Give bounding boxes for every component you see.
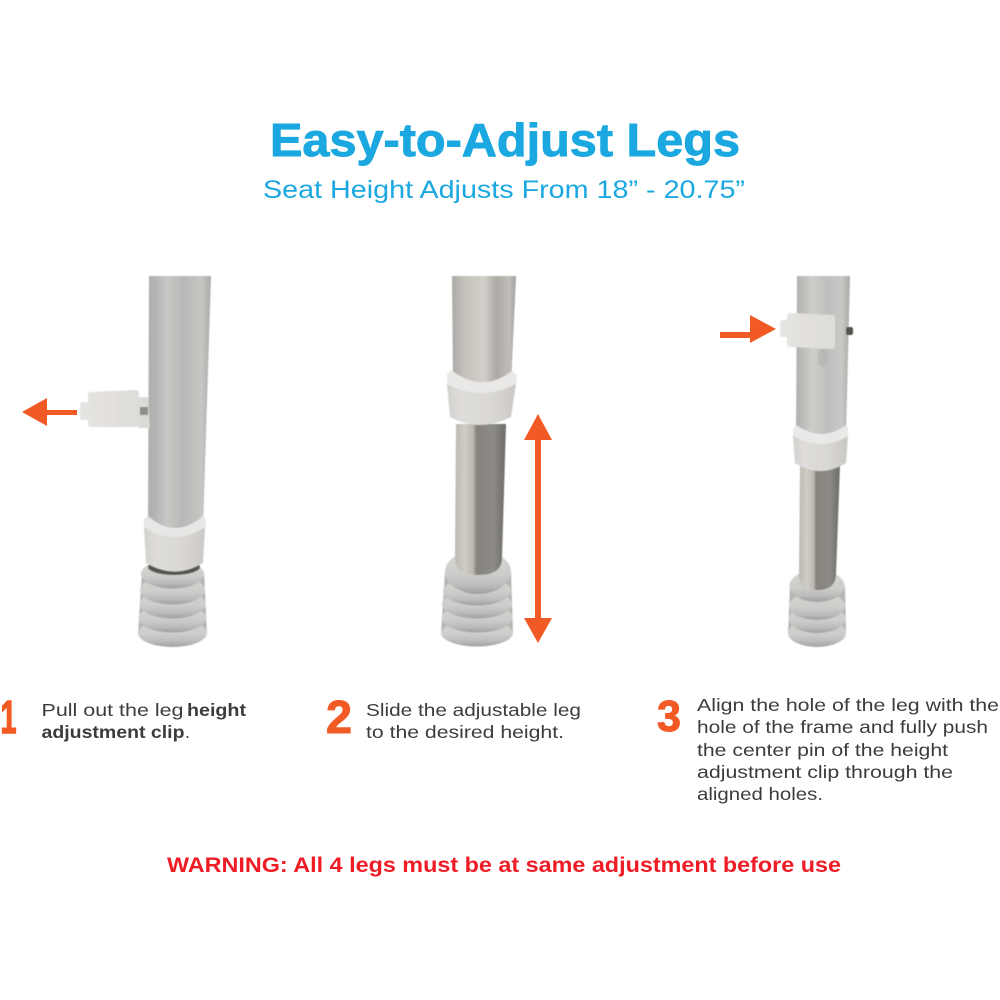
leg photo 2: sliding leg (441, 276, 517, 646)
step 3 text: the center pin of the height (697, 740, 948, 760)
step 3 text: adjustment clip through the (697, 762, 953, 782)
step 1 number: 1 (0, 691, 16, 743)
step 2 text (366, 700, 581, 742)
title: Easy-to-Adjust Legs (270, 114, 740, 166)
step 3 text: aligned holes. (697, 784, 823, 804)
step 3 text: Align the hole of the leg with the (697, 695, 999, 715)
step 3 text: hole of the frame and fully push (697, 717, 988, 737)
step 3 number: 3 (657, 692, 681, 741)
arrow: push right (720, 315, 776, 343)
arrow: up and down (524, 414, 552, 643)
step 1 text: Pull out the leg (42, 700, 184, 720)
step 1 text: height (187, 700, 246, 720)
step 1 text: . (185, 722, 190, 742)
step 3 text (697, 695, 999, 804)
leg photo 3: clip pushed in (780, 276, 853, 647)
step 2 text: to the desired height. (366, 722, 564, 742)
step 1 text: adjustment clip (42, 722, 184, 742)
arrow: pull left (22, 398, 77, 426)
step 2 text: Slide the adjustable leg (366, 700, 581, 720)
warning: WARNING: All 4 legs must be at same adjustment before use (167, 854, 841, 877)
subtitle: Seat Height Adjusts From 18” - 20.75” (263, 176, 745, 204)
step 2 number: 2 (326, 691, 352, 743)
step 1 text (42, 700, 246, 742)
leg photo 1: pulled-out clip (80, 276, 211, 647)
